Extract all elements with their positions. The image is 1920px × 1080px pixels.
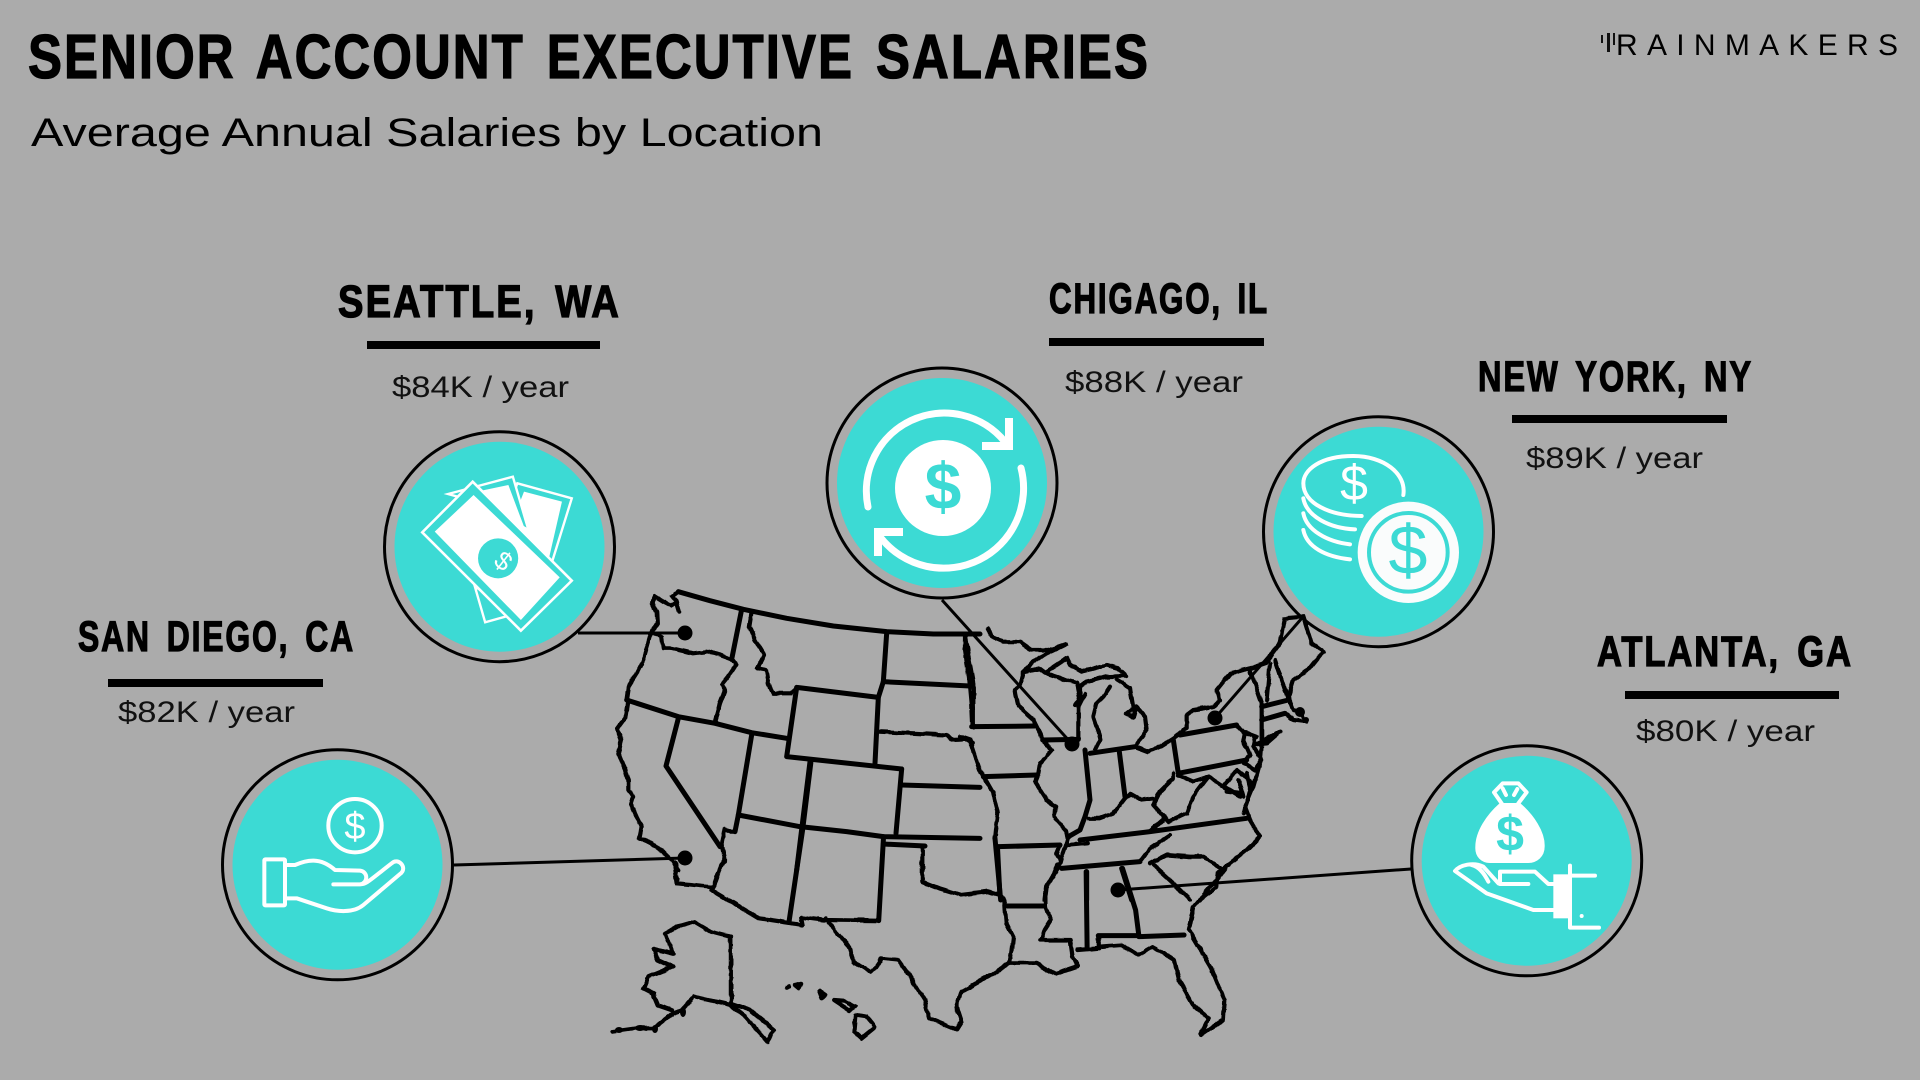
Alaska outline (612, 922, 774, 1042)
connector lines and location dots (454, 600, 1411, 896)
panel: Chicago (827, 275, 1269, 598)
icon: coin stack: $ (1389, 511, 1427, 589)
logo: Rainmakers: RAINMAKERS (1616, 29, 1898, 62)
New York circle (1264, 417, 1494, 647)
Chicago rule (1049, 338, 1264, 346)
subtitle: Average Annual Salaries by Location (31, 111, 823, 155)
icon: coin stack: $ (1340, 455, 1368, 511)
panel: New York (1264, 353, 1753, 647)
Seattle rule (367, 341, 600, 349)
New York heading: NEW YORK, NY (1478, 353, 1753, 401)
Atlanta heading: ATLANTA, GA (1597, 628, 1853, 676)
Atlanta circle (1412, 746, 1642, 976)
icon: money bag on hand (1422, 756, 1632, 966)
icon: circular dollar arrows: $ (925, 449, 961, 523)
San Diego heading: SAN DIEGO, CA (78, 613, 355, 661)
Seattle circle (384, 432, 614, 662)
Chicago circle (827, 368, 1057, 598)
panel: San Diego (78, 613, 452, 980)
icon: circular dollar arrows (837, 378, 1047, 588)
Chicago heading: CHIGAGO, IL (1049, 275, 1269, 323)
San Diego circle (222, 750, 452, 980)
icon: money bag on hand: $ (1496, 806, 1524, 862)
Atlanta rule (1625, 691, 1839, 699)
panel: Atlanta (1412, 628, 1853, 976)
Seattle heading: SEATTLE, WA (338, 276, 621, 327)
US map with state outlines (612, 592, 1323, 1042)
Chicago salary: $88K / year (1065, 366, 1243, 399)
San Diego salary: $82K / year (118, 696, 295, 729)
Cape Cod and island details (615, 707, 1309, 1033)
Seattle salary: $84K / year (392, 371, 569, 404)
icon: open hand with coin (232, 760, 442, 970)
San Diego rule (108, 679, 323, 687)
icon: banknotes (394, 442, 604, 652)
Hawaii islands (787, 983, 875, 1038)
icon: coin stack (1274, 427, 1484, 637)
New York rule (1512, 415, 1727, 423)
Atlanta salary: $80K / year (1636, 715, 1815, 748)
title: SENIOR ACCOUNT EXECUTIVE SALARIES (28, 23, 1150, 92)
icon: open hand with coin: $ (344, 806, 366, 848)
icon: banknotes: $ (489, 545, 519, 578)
panel: Seattle (338, 276, 621, 662)
New York salary: $89K / year (1526, 442, 1703, 475)
